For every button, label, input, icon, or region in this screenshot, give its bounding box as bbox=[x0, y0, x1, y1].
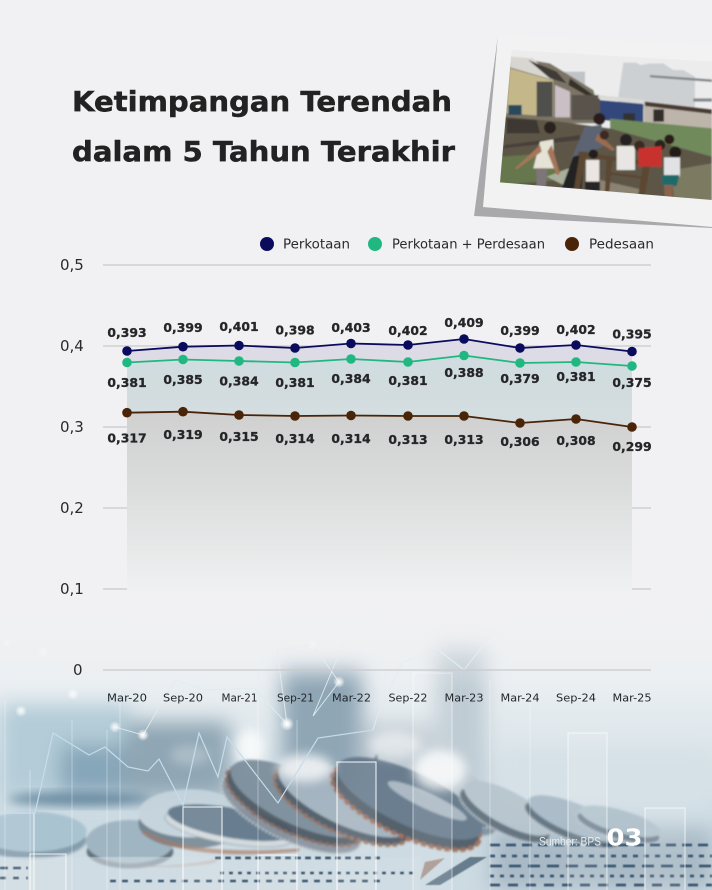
series: Perkotaan: 0,402 bbox=[388, 323, 428, 338]
shaded band: Perkotaan to combined bbox=[127, 339, 632, 366]
source note: Sumber: BPS bbox=[539, 836, 601, 848]
legend item: Perkotaan bbox=[260, 237, 350, 252]
frame paper bbox=[483, 35, 712, 227]
series: Perkotaan + Perdesaan: 0,381 bbox=[556, 369, 596, 384]
man in plaid shirt bbox=[562, 113, 615, 188]
ground bbox=[498, 117, 712, 203]
y axis labels: 0,1 bbox=[60, 580, 84, 598]
shacks bbox=[506, 60, 596, 125]
series: Perkotaan + Perdesaan: 0,384 bbox=[219, 374, 259, 388]
overlay bars bbox=[0, 673, 685, 890]
top fade into page bbox=[280, 630, 495, 682]
series: Perkotaan: 0,395 bbox=[612, 326, 652, 342]
series: Pedesaan: 0,313 bbox=[444, 432, 484, 447]
x axis labels: Mar-23 bbox=[444, 692, 484, 704]
series: Pedesaan bbox=[107, 407, 652, 454]
line chart bbox=[60, 256, 652, 704]
series: Pedesaan: 0,306 bbox=[500, 434, 540, 449]
y axis labels bbox=[60, 256, 84, 679]
series: Perkotaan bbox=[107, 315, 652, 356]
series: Perkotaan: 0,402 bbox=[556, 322, 596, 337]
blurred city backdrop bbox=[0, 645, 712, 890]
series: Perkotaan + Perdesaan: 0,385 bbox=[163, 372, 203, 387]
series: Perkotaan + Perdesaan bbox=[107, 351, 652, 390]
series: Perkotaan + Perdesaan: 0,388 bbox=[444, 365, 484, 380]
series: Perkotaan: 0,399 bbox=[500, 323, 540, 338]
legend item: Perkotaan: Perkotaan bbox=[283, 238, 350, 252]
legend item: Perkotaan + Perdesaan: Perkotaan + Perdesaan bbox=[392, 238, 545, 252]
dark blurred coin on left bbox=[8, 792, 152, 806]
y axis labels: 0,5 bbox=[60, 256, 84, 274]
x axis labels: Sep-22 bbox=[388, 692, 428, 704]
series: Perkotaan: 0,399 bbox=[163, 320, 203, 335]
photograph bbox=[500, 56, 712, 200]
title bbox=[72, 86, 455, 168]
x axis labels bbox=[107, 692, 652, 704]
series: Perkotaan: 0,403 bbox=[331, 320, 371, 335]
legend item: Pedesaan: Pedesaan bbox=[589, 238, 654, 252]
x axis labels: Mar-20 bbox=[107, 692, 147, 704]
large leaning coin stacks bbox=[220, 754, 660, 855]
legend item: Pedesaan bbox=[565, 237, 654, 252]
series: Perkotaan: 0,393 bbox=[107, 325, 147, 340]
x axis labels: Mar-25 bbox=[612, 692, 652, 704]
series: Perkotaan: 0,401 bbox=[219, 319, 259, 334]
blue and white buildings bbox=[598, 95, 644, 104]
y axis grid bbox=[103, 265, 651, 670]
white blurred highlights bbox=[170, 730, 264, 766]
series: Pedesaan: 0,315 bbox=[219, 429, 259, 444]
overlay vertical lines bbox=[5, 680, 530, 890]
table of figures under the coins bbox=[0, 845, 712, 890]
series: Perkotaan: 0,409 bbox=[444, 315, 484, 330]
boy in white vest bbox=[515, 122, 560, 186]
y axis labels: 0,3 bbox=[60, 418, 84, 436]
title: Ketimpangan Terendah bbox=[72, 86, 452, 118]
series: Pedesaan: 0,313 bbox=[388, 432, 428, 447]
wooden cart bbox=[574, 152, 651, 195]
overlay glowing dots bbox=[16, 676, 344, 740]
frame shadow bbox=[474, 35, 712, 228]
title: dalam 5 Tahun Terakhir bbox=[72, 136, 455, 168]
series: Pedesaan: 0,308 bbox=[556, 433, 596, 448]
legend bbox=[260, 237, 654, 252]
background photo: coins and financial overlay bbox=[0, 640, 712, 890]
x axis labels: Mar-22 bbox=[332, 692, 371, 704]
overlay line chart bbox=[0, 730, 373, 813]
series: Perkotaan + Perdesaan: 0,381 bbox=[388, 373, 428, 388]
page number: 03 bbox=[606, 826, 642, 852]
small coins on the left bbox=[0, 789, 300, 868]
series: Pedesaan: 0,314 bbox=[331, 431, 371, 446]
series: Perkotaan: 0,398 bbox=[275, 322, 315, 338]
series: Perkotaan + Perdesaan: 0,381 bbox=[275, 375, 315, 390]
y axis labels: 0,4 bbox=[60, 337, 84, 355]
x axis labels: Mar-21 bbox=[222, 692, 258, 704]
towers bbox=[618, 63, 695, 108]
grass bbox=[610, 119, 712, 163]
photo frame with children at riverside slum bbox=[474, 35, 712, 228]
series: Pedesaan: 0,299 bbox=[612, 439, 652, 454]
series: Pedesaan: 0,314 bbox=[275, 431, 315, 446]
y axis labels: 0 bbox=[73, 661, 83, 679]
shaded band: combined to Pedesaan bbox=[127, 356, 632, 427]
x axis labels: Sep-20 bbox=[163, 692, 203, 704]
series: Perkotaan + Perdesaan: 0,384 bbox=[331, 371, 371, 386]
shaded band: below Pedesaan bbox=[127, 412, 632, 592]
series: Pedesaan: 0,319 bbox=[163, 427, 203, 442]
y axis labels: 0,2 bbox=[60, 499, 84, 517]
x axis labels: Sep-21 bbox=[277, 692, 314, 704]
series: Perkotaan + Perdesaan: 0,381 bbox=[107, 375, 147, 390]
series: Perkotaan + Perdesaan: 0,379 bbox=[500, 371, 540, 386]
x axis labels: Sep-24 bbox=[556, 692, 596, 704]
series: Pedesaan: 0,317 bbox=[107, 430, 147, 446]
white clouds over the coins bbox=[277, 731, 466, 790]
series: Perkotaan + Perdesaan: 0,375 bbox=[612, 375, 652, 390]
x axis labels: Mar-24 bbox=[500, 692, 540, 704]
children around cart bbox=[585, 130, 681, 197]
